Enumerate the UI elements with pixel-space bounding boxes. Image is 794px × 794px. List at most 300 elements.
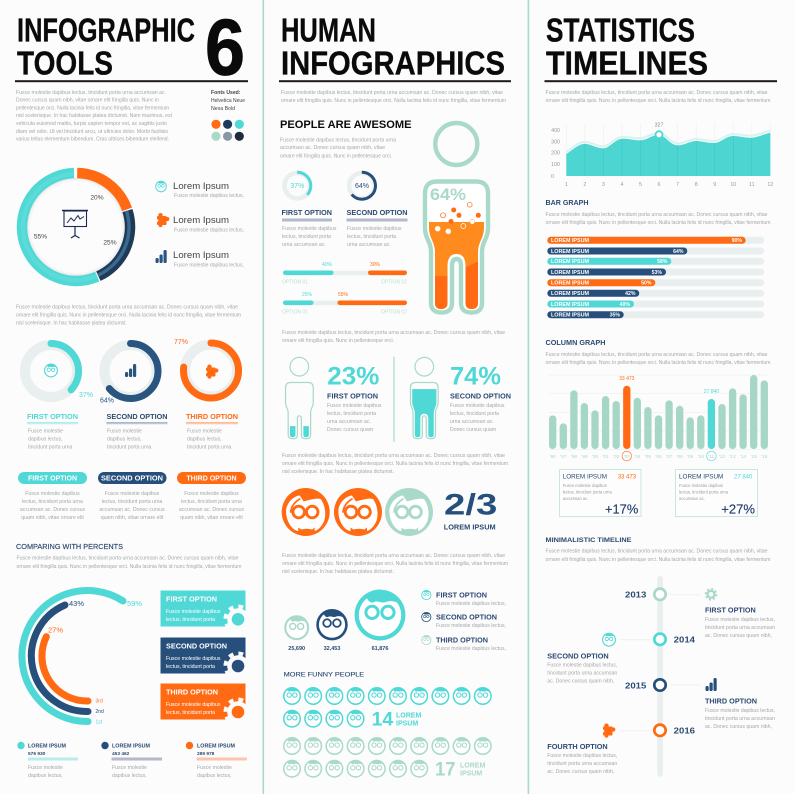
owl size comparison: 32,453 (324, 646, 340, 652)
column axis labels (550, 454, 768, 459)
title: TOOLS (17, 44, 113, 82)
milestone 2013: 2013 (625, 590, 647, 600)
panel: second option: Fusce molestie dapibus (166, 656, 221, 662)
heading: comparing with percents: COMPARING WITH PERCENTS (16, 544, 123, 551)
text block (546, 352, 770, 366)
description: Fusce molestie dapibus (327, 403, 382, 409)
text block (282, 553, 508, 575)
milestone 2016: Fusce molestie dapibus lectus, (547, 753, 617, 759)
big number 6: 6 (205, 2, 245, 92)
description: Fusce molestie dapibus (450, 403, 505, 409)
bar pair 2: 55% (338, 292, 349, 298)
horizontal bar graph: LOREM IPSUM (551, 270, 589, 276)
title (17, 12, 195, 82)
person stat 74% (410, 357, 511, 439)
description: urna accumsan ac. (450, 419, 494, 425)
option pills: THIRD OPTION (186, 476, 237, 482)
bar pair 2: OPTION 02 (381, 310, 407, 316)
panel: third option: THIRD OPTION (166, 688, 218, 696)
big person chart 64%: 64% (430, 185, 466, 204)
x axis labels: 1 (565, 182, 568, 188)
owl grid teal: IPSUM (396, 720, 418, 728)
owl grid teal (283, 687, 492, 731)
ring: 64% (103, 344, 158, 398)
milestone 2014 (547, 633, 695, 684)
text block: nisl scelerisque. In hac habitasse platea dictumst. (282, 569, 394, 575)
owl grid green (283, 737, 492, 781)
mini rings (284, 172, 376, 199)
milestone 2015: Fusce molestie dapibus lectus, (705, 708, 775, 714)
column axis labels: '06 (655, 454, 662, 459)
option columns: lectus, tincidunt porta (282, 234, 331, 240)
description: Donec cursus quam (450, 427, 496, 433)
x axis labels: 11 (749, 182, 755, 188)
x axis labels: 7 (676, 182, 679, 188)
label 77%: 77% (174, 339, 188, 346)
area chart (551, 122, 773, 188)
title (546, 12, 708, 82)
label 37%: 37% (79, 392, 93, 399)
milestone 2014: tincidunt porta urna accumsan (547, 670, 617, 676)
icon: person 23% (286, 357, 313, 439)
option headings with underlines: Fusce molestie (28, 428, 63, 434)
icon: bars (125, 364, 136, 377)
timeline (547, 576, 775, 777)
milestone 2014: Fusce molestie dapibus lectus, (547, 662, 617, 668)
callout: 27 840: +27% (721, 501, 755, 516)
milestone 2016: 2016 (674, 726, 695, 736)
heading: bar graph: BAR GRAPH (546, 198, 588, 207)
ring charts (24, 339, 238, 404)
stat row: 576 930 (28, 751, 46, 757)
owl legend: FIRST OPTION (436, 591, 487, 600)
horizontal bar graph: LOREM IPSUM (551, 259, 589, 265)
text block (282, 453, 508, 475)
owl grid green: 17 (435, 760, 456, 781)
column axis labels: '12 (719, 454, 725, 459)
callout: 33 473: +17% (605, 501, 639, 516)
legend text 1 (173, 181, 244, 199)
description (327, 403, 382, 433)
option headings with underlines: Fusce molestie (187, 428, 222, 434)
horizontal bar graph (547, 237, 764, 319)
stat row: LOREM IPSUM (112, 744, 150, 750)
option pills: accumsan ac. Donec cursus (179, 507, 244, 513)
arc chart: 1st (96, 720, 103, 726)
text block: Fusce molestie dapibus lectus, tincidunt porta urna accumsan ac. Donec cursus quam nibh, vitae (282, 553, 505, 559)
intro text: ornare elit fringilla quis. Nunc in pellentesque orci. Nulla lacinia felis id nunc fringilla, vitae fermentum (281, 98, 506, 104)
owl grid green: IPSUM (460, 770, 482, 778)
label 64%: 64% (100, 398, 114, 404)
icon: puzzle (155, 213, 169, 227)
label: FIRST OPTION (327, 392, 378, 400)
bar pair 2: 25% (302, 292, 313, 298)
milestone 2013: tincidunt porta urna accumsan (705, 625, 775, 631)
highlighted columns (623, 389, 630, 445)
text block: Fusce molestie dapibus lectus, tincidunt porta urna (280, 137, 396, 143)
callout: 27 840: accumsan ac. (679, 496, 705, 501)
option pills: Fusce molestie dapibus (184, 491, 239, 497)
arc labels (48, 599, 142, 634)
stat row: dapibus lectus, (197, 773, 232, 779)
stat row: 289 978 (197, 751, 215, 757)
legend text 1: Fusce molestie dapibus lectus, (174, 193, 244, 199)
legend text 1: Lorem Ipsum (173, 181, 229, 191)
text block (16, 305, 241, 326)
text block: Fusce molestie dapibus lectus, tincidunt porta urna accumsan ac. Donec cursus quam nibh, vitae (546, 352, 768, 358)
legend text 3 (173, 250, 244, 268)
column axis labels: '07 (666, 454, 673, 459)
panel: human infographics (279, 12, 511, 104)
text block (280, 137, 396, 159)
option columns: lectus, tincidunt porta (347, 234, 396, 240)
horizontal bar graph: 50% (641, 281, 652, 287)
stat row: LOREM IPSUM (28, 744, 66, 750)
text block: Fusce molestie dapibus lectus, tincidunt porta urna accumsan ac. Donec cursus quam nibh, vitae (282, 330, 505, 336)
callout: 33 473: lectus, tincidunt porta urna (563, 489, 612, 494)
stat row (17, 742, 247, 779)
value: 74% (450, 362, 501, 390)
option pills: accumsan ac. Donec cursus (99, 507, 165, 513)
x axis labels: 5 (639, 182, 642, 188)
stat row: 453 462 (112, 751, 130, 757)
milestone 2016: FOURTH OPTION (547, 742, 608, 751)
y axis labels: 0 (551, 174, 554, 180)
horizontal bar graph: LOREM IPSUM (551, 249, 589, 255)
stat row: Fusce molestie (197, 765, 232, 771)
arc chart: 2nd (96, 709, 104, 715)
panel: first option: lectus, tincidunt porta (166, 617, 215, 623)
intro text: Fusce molestie dapibus lectus, tincidunt porta urna accumsan ac. (16, 90, 166, 96)
option headings with underlines: dapibus lectus, (107, 436, 142, 442)
column axis labels: '05 (645, 454, 651, 459)
bar pair 2: OPTION 01 (282, 310, 308, 316)
intro text: diam vel odio. Ut vel tincidunt arcu, ut ultricies dolor. Morbi facilisis (16, 129, 168, 135)
x axis labels: 9 (713, 182, 716, 188)
ring: 37% (24, 344, 78, 398)
bar pair 1: OPTION 01 (282, 280, 308, 286)
option headings with underlines: tincidunt porta urna (28, 444, 73, 450)
callout: 33 473: Fusce molestie dapibus (563, 483, 607, 488)
milestone 2013 (625, 589, 775, 639)
column axis labels: '97 (560, 454, 567, 459)
column axis labels: '08 (677, 454, 683, 459)
option pills: SECOND OPTION (101, 476, 163, 482)
milestone 2016 (547, 724, 695, 775)
fonts used: Nexa Bold (211, 106, 235, 112)
owl ratio 2/3: 2/3 (444, 488, 497, 521)
description (450, 403, 505, 433)
option columns: urna accumsan ac. (347, 242, 391, 248)
bubbles (435, 202, 481, 234)
owl legend: THIRD OPTION (436, 636, 488, 645)
x axis labels: 3 (602, 182, 605, 188)
callout: 27 840: lectus, tincidunt porta urna (679, 489, 729, 494)
column axis labels: '10 (698, 454, 704, 459)
x axis labels: 2 (583, 182, 586, 188)
x axis labels: 4 (621, 182, 624, 188)
horizontal bar graph: 35% (610, 313, 620, 319)
stat row: dapibus lectus, (28, 773, 63, 779)
donut labels: 55% (34, 234, 47, 240)
text block: ornare elit fringilla quis. Nunc in pellentesque orci. (280, 153, 392, 159)
intro text: Donec cursus quam nibh, vitae ornare elit fringilla quis. Nunc in (16, 98, 159, 104)
intro text: pellentesque orci. Nulla lacinia felis id nunc fringilla, vitae fermentum (16, 105, 169, 111)
heading: more funny people: MORE FUNNY PEOPLE (284, 672, 365, 679)
text block: Fusce molestie dapibus lectus, tincidunt porta urna accumsan ac. Donec cursus quam nibh, vitae (546, 548, 768, 554)
owl grid teal: 14 (372, 710, 394, 731)
owl legend: Fusce molestie dapibus lectus, (436, 623, 506, 629)
text block (546, 212, 770, 226)
x axis labels: 12 (767, 182, 773, 188)
owl ratio 2/3: LOREM IPSUM (444, 522, 496, 531)
panel: infographic tools header (15, 2, 248, 143)
x axis labels: 6 (658, 182, 661, 188)
heading: column graph: COLUMN GRAPH (546, 340, 606, 347)
intro text: Fusce molestie dapibus lectus, tincidunt porta urna accumsan ac. Donec cursus quam nibh, vitae (546, 90, 768, 96)
description: lectus, tincidunt porta (450, 411, 499, 417)
milestone 2015: tincidunt porta urna accumsan (705, 716, 775, 722)
stat row: Fusce molestie (112, 765, 147, 771)
column axis labels: '01 (603, 454, 609, 459)
column axis labels: '00 (592, 454, 598, 459)
option pills: quam nibh, vitae ornare elit (21, 515, 84, 521)
intro text (281, 90, 506, 104)
milestone 2013: Fusce molestie dapibus lectus, (705, 617, 775, 623)
text block: nisl scelerisque. In hac habitasse platea dictumst. (16, 320, 127, 326)
x axis labels: 8 (695, 182, 698, 188)
legend: donut (155, 181, 244, 268)
owl legend: Fusce molestie dapibus lectus, (436, 646, 506, 652)
text block: accumsan ac. Donec cursus quam nibh, vitae (280, 145, 385, 151)
legend text 2: Fusce molestie dapibus lectus, (174, 228, 244, 234)
owl legend: SECOND OPTION (436, 613, 497, 622)
fonts used (211, 90, 245, 112)
label: SECOND OPTION (450, 392, 511, 400)
intro text (16, 90, 173, 143)
y axis labels: 400 (551, 128, 560, 134)
callout: 33 473: 33 473 (618, 475, 637, 481)
option columns: Fusce molestie dapibus (282, 226, 337, 232)
fonts used: Fonts Used: (211, 90, 241, 96)
column axis labels: '98 (571, 454, 577, 459)
mini rings: 64% (355, 183, 369, 190)
owl size comparison: 25,690 (288, 646, 305, 652)
bar pair 1: 30% (370, 262, 381, 268)
text block: Fusce molestie dapibus lectus, tincidunt porta urna accumsan ac. Donec cursus quam nibh, vitae (16, 305, 238, 311)
column axis labels: '16 (761, 454, 768, 459)
horizontal bar graph: 58% (657, 259, 668, 265)
mini rings: 37% (290, 183, 304, 190)
option pills: lectus, tincidunt porta urna (102, 499, 163, 505)
milestone 2013: FIRST OPTION (705, 606, 756, 615)
panel: statistics timelines header (544, 12, 777, 104)
text block: ornare elit fringilla quis. Nunc in pellentesque orci. Nulla lacinia felis id nunc fringilla, vitae fermentum (282, 561, 508, 567)
arc labels: 59% (127, 599, 142, 608)
column chart (549, 375, 768, 461)
option pills: quam nibh, vitae ornare elit (101, 515, 164, 521)
milestone 2014: SECOND OPTION (547, 651, 609, 660)
icon: presentation board (62, 210, 88, 238)
bar pair 1: OPTION 02 (381, 280, 407, 286)
donut labels: 20% (90, 194, 104, 202)
stat row: Fusce molestie (28, 765, 63, 771)
panel: second option (160, 638, 252, 680)
option pills: quam nibh, vitae ornare elit (180, 515, 243, 521)
timeline spine (657, 576, 663, 777)
progress bars (282, 262, 407, 316)
milestone 2016: ac. Donec cursus quam nibh, (547, 769, 614, 775)
heading: minimalistic timeline: MINIMALISTIC TIMELINE (546, 537, 632, 544)
option headings with underlines: Fusce molestie (107, 428, 142, 434)
intro text: vehicula euismod mattis, turpis sapien tempor est, ac sagittis justo (16, 121, 167, 127)
column values (619, 376, 719, 395)
owl legend (421, 590, 506, 652)
horizontal bar graph: LOREM IPSUM (551, 313, 589, 319)
column axis labels: '15 (751, 454, 757, 459)
title (281, 12, 505, 82)
option headings with underlines: SECOND OPTION (106, 412, 168, 421)
option pills (18, 472, 246, 521)
horizontal bar graph: 53% (652, 270, 662, 276)
option columns: urna accumsan ac. (282, 242, 326, 248)
text block: ornare elit fringilla quis. Nunc in pellentesque orci. Nulla lacinia felis id nunc fringilla, vitae fermentum (546, 220, 770, 226)
column values: 33 473 (619, 376, 635, 382)
icon: puzzle (204, 364, 218, 379)
arc chart: 3rd (96, 698, 103, 704)
heading: people are awesome: PEOPLE ARE AWESOME (280, 119, 412, 131)
option headings with underlines: THIRD OPTION (186, 412, 238, 421)
owl grid green: LOREM (460, 762, 485, 770)
callout: 33 473: accumsan ac. (563, 496, 589, 501)
horizontal bar graph: 90% (732, 238, 742, 244)
column divider left (262, 0, 264, 794)
donut chart (5, 156, 147, 298)
column axis labels: '14 (740, 454, 747, 459)
panel: third option: Fusce molestie dapibus (166, 702, 221, 708)
x axis labels (565, 182, 773, 188)
text block: Fusce molestie dapibus lectus, tincidunt porta urna accumsan ac. Donec cursus quam nibh, vitae (282, 453, 505, 459)
text block: nisl scelerisque. In hac habitasse platea dictumst. (282, 469, 394, 475)
text block: ornare elit fringilla quis. Nunc in pellentesque orci. (282, 338, 394, 344)
option columns (282, 208, 408, 248)
stat row: LOREM IPSUM (197, 744, 235, 750)
text block: Fusce molestie dapibus lectus, tincidunt porta urna accumsan ac. Donec cursus quam nibh, vitae (546, 212, 768, 218)
intro text: varius tellus elementum bibendum. Cras ultrices bibendum eleifend. (16, 137, 169, 143)
title: INFOGRAPHICS (281, 44, 505, 82)
bar pair 1: 40% (322, 262, 333, 268)
option headings with underlines (27, 412, 238, 450)
stat row: dapibus lectus, (112, 773, 147, 779)
callout: 33 473 (560, 470, 641, 516)
intro text: Fusce molestie dapibus lectus, tincidunt porta urna accumsan ac. Donec cursus quam nibh, vitae (281, 90, 503, 96)
milestone 2015: THIRD OPTION (705, 696, 757, 705)
icon: bars (156, 250, 167, 263)
column axis labels: '99 (581, 454, 588, 459)
owl grid teal: LOREM (396, 712, 421, 720)
owl ratio 2/3 (282, 488, 497, 536)
heading rule (15, 80, 248, 82)
horizontal bar graph: 40% (620, 302, 630, 308)
panel: second option: SECOND OPTION (166, 642, 227, 650)
callout: 27 840: LOREM IPSUM (679, 474, 723, 481)
arc labels: 43% (69, 599, 84, 608)
description: lectus, tincidunt porta (327, 411, 376, 417)
option columns: SECOND OPTION (346, 208, 408, 217)
text block: ornare elit fringilla quis. Nunc in pellentesque orci. Nulla lacinia felis id nunc fringilla, vitae fermentum (546, 360, 770, 366)
legend text 3: Fusce molestie dapibus lectus, (174, 262, 244, 268)
callout: 27 840 (676, 470, 758, 516)
callout: 33 473: LOREM IPSUM (563, 474, 607, 481)
description: urna accumsan ac. (327, 419, 371, 425)
column axis labels: '13 (730, 454, 736, 459)
legend text 3: Lorem Ipsum (173, 250, 229, 260)
horizontal bar graph: LOREM IPSUM (551, 238, 589, 244)
arc chart (22, 591, 142, 726)
column divider right (528, 0, 529, 794)
milestone 2013: ac. Donec cursus quam nibh, (705, 633, 772, 639)
text block: ornare elit fringilla quis. Nunc in pellentesque orci. Nulla lacinia felis id nunc fringilla, vitae fermentum (16, 564, 242, 570)
column axis labels: '09 (687, 454, 694, 459)
column axis labels: '03 (624, 454, 630, 459)
column axis labels: '02 (613, 454, 620, 459)
horizontal bar graph: LOREM IPSUM (551, 302, 589, 308)
title: HUMAN (281, 12, 376, 48)
donut labels: 25% (103, 240, 117, 246)
owl legend: Fusce molestie dapibus lectus, (436, 601, 506, 607)
column axis labels: '96 (550, 454, 556, 459)
legend text 2: Lorem Ipsum (173, 215, 229, 225)
option pills: FIRST OPTION (28, 476, 77, 482)
column axis labels: '04 (634, 454, 641, 459)
text block: ornare elit fringilla quis. Nunc in pellentesque orci. Nulla lacinia felis id nunc fringilla, vitae fermentum (282, 461, 508, 467)
intro text (546, 90, 770, 104)
title: INFOGRAPHIC (17, 12, 195, 48)
milestone 2015: ac. Donec cursus quam nibh, (705, 724, 772, 730)
milestone 2016: tincidunt porta urna accumsan (547, 761, 617, 767)
description: Donec cursus quam (327, 427, 373, 433)
callout: 27 840: Fusce molestie dapibus (679, 483, 723, 488)
option columns: Fusce molestie dapibus (347, 226, 402, 232)
text block (16, 556, 242, 570)
y axis labels: 200 (551, 151, 560, 157)
y axis labels: 100 (551, 162, 560, 168)
option headings with underlines: dapibus lectus, (28, 436, 63, 442)
y axis labels (551, 128, 560, 180)
title: TIMELINES (546, 44, 708, 82)
option pills: lectus, tincidunt porta urna (181, 499, 242, 505)
horizontal bar graph: LOREM IPSUM (551, 281, 589, 287)
panel: third option (160, 684, 252, 726)
option pills: Fusce molestie dapibus (105, 491, 160, 497)
y axis labels: 300 (551, 139, 560, 145)
panel: first option (160, 590, 252, 632)
person stat 23% (286, 357, 382, 439)
horizontal bar graph: 64% (673, 249, 684, 255)
bar pair 2 (282, 292, 407, 316)
horizontal bar graph: 42% (625, 291, 636, 297)
option columns: FIRST OPTION (282, 208, 332, 217)
intro text: ornare elit fringilla quis. Nunc in pellentesque orci. Nulla lacinia felis id nunc fringilla, vitae fermentum (546, 98, 770, 104)
stat divider (393, 357, 395, 442)
option pills: Fusce molestie dapibus (25, 491, 80, 497)
callout: 27 840: 27 840 (734, 475, 753, 481)
option pills: lectus, tincidunt porta urna (22, 499, 83, 505)
milestone 2015: 2015 (625, 681, 647, 691)
icon: person 74% (410, 357, 438, 439)
icon: face (155, 181, 167, 192)
horizontal bar graph: LOREM IPSUM (551, 291, 589, 297)
